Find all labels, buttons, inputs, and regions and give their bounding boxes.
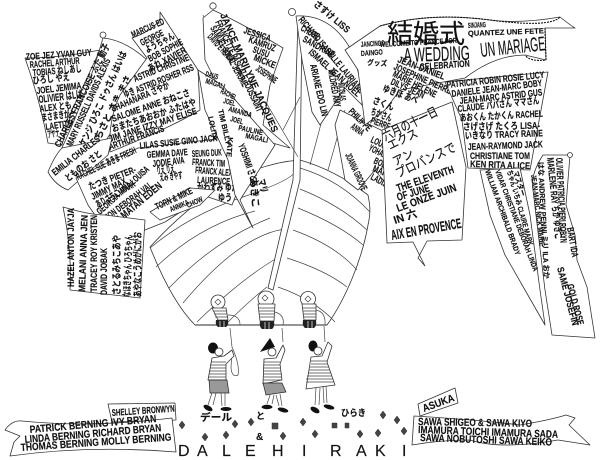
flag outline <box>48 138 112 190</box>
guest names: SAME JOSEFIN <box>554 266 580 327</box>
guest names: MELANI ANNA JEN <box>77 215 91 292</box>
guest names: ゆう <box>218 193 232 204</box>
flag outline <box>345 17 575 125</box>
guest names: KAMRUZ <box>247 34 277 54</box>
side names: ゆきほ あべ <box>381 83 420 107</box>
title letters: Dale Hiraki: L <box>222 443 231 460</box>
figure: centre man pulling rope <box>260 328 289 414</box>
of June: OF JUNE <box>395 182 431 204</box>
flag outline <box>110 12 200 152</box>
guest names: マスター <box>511 170 529 197</box>
side names: DILYS JEAN <box>389 77 426 101</box>
flag: Magali and Rachel <box>198 69 275 228</box>
title: Japanese wedding: 結婚式 <box>387 19 465 49</box>
guest names: JODIE AVA <box>152 155 185 170</box>
side names: さくん <box>371 95 396 113</box>
in: IN 六 <box>392 206 419 227</box>
guest names: PAULINE <box>238 123 264 137</box>
guest names: まさまきがー <box>41 107 76 124</box>
guest names: ASTRID CHRISTINE <box>132 52 191 85</box>
family names: SAWA SHIGEO & SAWA KIYO <box>418 416 532 430</box>
guest names: SAMUEL SOLAL JEROME <box>207 24 250 89</box>
flag outline <box>480 168 545 325</box>
ampersand: & <box>256 432 263 443</box>
flag outline <box>382 102 466 266</box>
guest names: JOEL <box>222 96 237 108</box>
guest names: GEORGE <box>138 28 166 49</box>
flag: Olivier and Marlene <box>529 152 595 338</box>
title letters: Dale Hiraki: I <box>402 443 406 460</box>
family names: PATRICK BERNING IVY BRYAN <box>29 413 157 436</box>
guest names: さげさげ たくろ LISA- <box>463 120 540 133</box>
flag: Marcus <box>107 12 200 153</box>
small flag: Asuka <box>418 388 458 416</box>
guest names: ちさと さき まさ <box>93 74 134 141</box>
flag outline <box>25 50 100 145</box>
guest names: JESSICA <box>242 25 272 45</box>
celebration: CELEBRATION <box>419 59 470 73</box>
guest names <box>529 157 586 327</box>
guest names: MILDRED AMY <box>325 69 343 108</box>
guest names: DAVID ETIENNE <box>205 32 236 65</box>
guest names: ケンジ ひろこ ドゥさん はいは <box>78 49 130 148</box>
guest names <box>342 106 396 193</box>
panel: date and place flag <box>380 102 466 266</box>
guest names: SANDRINE <box>301 34 336 61</box>
side names: JEAN-DANIEL <box>396 55 447 83</box>
side names <box>361 38 453 133</box>
title letters: Dale Hiraki: H <box>272 443 284 460</box>
boat hull <box>150 160 370 325</box>
flag ball <box>288 8 296 16</box>
guest names: なほきちゃん ひろちゃん <box>122 234 135 297</box>
flag outline <box>60 38 147 152</box>
guest names: TORN & MIKE <box>154 186 195 213</box>
flag: Patricia <box>445 70 548 172</box>
guest names: ZOE JEZ YVAN GUY <box>25 47 93 63</box>
kana: to: と <box>256 411 265 421</box>
guest names: JOSEPHINE <box>253 63 279 86</box>
title letters: Dale Hiraki: I <box>302 443 306 460</box>
guest names: SHAHANARA さやか <box>110 80 172 115</box>
guest names: ARTHUR FRANCIS <box>107 124 166 153</box>
flag outline <box>63 207 145 298</box>
french line: QUANTEZ UNE FETE <box>468 26 544 38</box>
title letters: Dale Hiraki: K <box>375 443 386 460</box>
guest names: ANNA <box>348 121 366 139</box>
guest names: ALEX とも <box>39 100 72 115</box>
guest names: MAGALI <box>245 131 269 145</box>
guest names: OLIVIER PATRICIA PIERI ROBYN <box>553 158 568 243</box>
guest names: RACHEL SUE あきま FRESH <box>75 145 138 183</box>
guest names: WILLIAM ARCHIBALD BRADY <box>483 169 522 256</box>
guest names: DAUS <box>204 69 219 81</box>
flag outline <box>76 138 240 245</box>
guest names: MART <box>371 164 393 181</box>
guest names: JIMMY MAX <box>89 176 129 203</box>
guest names: RACHEL <box>219 87 239 102</box>
guest names: DANIELE JEAN-MARC BOBY <box>451 78 543 100</box>
guest names <box>204 69 269 208</box>
guest names: JANCE MARILYNE JACQUES <box>217 12 280 134</box>
guest names: ちゃん いちみ CLAIRE MARK <box>505 169 535 247</box>
guest names: PHILIPPE <box>346 106 373 134</box>
guest names: CLAUDE パパさん ママさん <box>457 95 540 115</box>
fist: right <box>300 292 325 328</box>
guest names: TIM BILLY <box>216 108 233 146</box>
guest names: NICOLAS <box>335 82 348 101</box>
guest names: MARCUS ED <box>130 16 166 41</box>
guest names <box>296 15 366 117</box>
guest names: MARLENE RAY ちか ゆきこ <box>544 157 564 240</box>
banner: Bernings and Bryans <box>5 403 176 456</box>
family names <box>20 413 172 454</box>
flag: Jance and Jessica <box>203 3 290 148</box>
guest names: SIMON DEBORAH VAL <box>97 180 155 227</box>
guest names: YOHAN <box>367 143 389 161</box>
guest names: とものお さと <box>63 149 105 184</box>
date in French: LE ONZE JUIN <box>395 182 458 215</box>
flag outline <box>150 188 215 220</box>
guest names: BART IDA <box>564 227 580 258</box>
flag outline <box>445 72 548 170</box>
guest names: ようちゃん <box>143 31 177 56</box>
flag outline <box>198 70 275 228</box>
heading: a wedding: A WEDDING <box>403 43 470 67</box>
guest names <box>154 186 205 214</box>
guest names: JOANNA GROOVE <box>342 152 369 193</box>
masts and spars <box>203 12 345 290</box>
flag outline <box>532 155 595 338</box>
figure: right man pulling rope <box>306 326 335 415</box>
guest names <box>25 47 93 141</box>
guest names: MICKE <box>252 53 277 71</box>
side names: グッズ <box>367 57 388 68</box>
family names: SAWA NOBUTOSHI SAWA KEIKO <box>420 432 552 449</box>
Asuka name: ASUKA <box>421 392 456 415</box>
guest names: VIDAR CHRISTIANE DEBORAH LINDA <box>493 168 540 273</box>
flag: Zoe <box>25 47 100 145</box>
guest names: たつき PIETER- <box>87 165 138 193</box>
date in English: THE ELEVENTH <box>395 164 456 195</box>
place: en: アン <box>390 146 416 169</box>
Aix en Provence: AIX EN PROVENCE <box>390 215 462 243</box>
guest names: NIKITH MATAN EDEN <box>97 180 165 239</box>
fist: left <box>211 295 240 327</box>
banner outline <box>412 415 590 445</box>
flag: Richard <box>288 0 366 125</box>
guest names: FRANCETTE PASCALE TOUSSAINT <box>212 19 265 114</box>
guest names: マリ <box>255 178 269 194</box>
guest names: CHLOE <box>298 23 321 43</box>
sinjang: SINJANG <box>468 20 486 30</box>
guest names: TRACEY ROY KRISTEN <box>89 215 100 292</box>
guest names: いきなり TRACY RAINE <box>465 128 543 142</box>
family names: THOMAS BERNING MOLLY BERNING <box>20 431 172 454</box>
guest names: さとるみちこあや <box>112 235 123 295</box>
guest names: あれ XAVIER <box>146 45 189 75</box>
guest names: AMANDA <box>227 104 253 120</box>
date in Japanese: 六月の十一日 <box>380 104 440 144</box>
side names: JOSEPHINE PIERRE <box>392 62 453 97</box>
side names: DAINGO <box>361 47 383 58</box>
guest names <box>107 16 198 153</box>
guest names: ひろし やえ <box>32 72 70 87</box>
guest names <box>50 134 105 184</box>
guest names: TOBIAS ねしあし <box>32 64 82 79</box>
guest names: BOB <box>372 156 388 171</box>
kana: Hiraki: ひらき <box>341 408 366 418</box>
flag: Rachel and Simon <box>75 133 240 245</box>
guest names: アヤナ <box>47 128 60 141</box>
guest names <box>66 208 144 297</box>
place: Provence: プロバンスで <box>393 140 458 181</box>
guest names: ISMAEL JEAN NOEL <box>306 47 363 99</box>
family names: IMAMURA TOICHI IMAMURA SADA <box>418 424 559 441</box>
family names: LINDA BERNING RICHARD BRYAN <box>24 422 162 446</box>
guest names: りえ りえ <box>156 164 175 177</box>
guest names: あやなこうめがにがお <box>132 232 144 297</box>
flag: Charles Francoise <box>52 32 147 152</box>
family names <box>418 416 559 449</box>
top edge dashes <box>380 17 560 60</box>
guest names: PATRICIA ROBIN ROSIE LUCY <box>446 70 545 91</box>
side names: MARIE HELENE <box>391 69 438 100</box>
title letters: Dale Hiraki: R <box>330 443 342 460</box>
diamond kites <box>179 411 407 441</box>
guest names: GOLD ROSE <box>564 283 586 326</box>
guest names: FRANCK TIM <box>192 157 225 170</box>
small flag: Shelley <box>108 403 176 422</box>
guest names: CHOW <box>185 194 205 210</box>
banner outline <box>5 418 176 456</box>
guest names: MAGALI <box>204 76 226 91</box>
guest names: LAURENCE <box>197 175 230 188</box>
guest names: ARIANE EDO LIN <box>307 63 330 117</box>
guest names: JEAN-MARC ASTRID GUS <box>459 87 543 107</box>
flag: Joanna and Philippe <box>335 106 396 195</box>
place: Aix: エクス <box>385 126 420 153</box>
Shelley name: SHELLEY BRONWYN <box>111 404 175 419</box>
guest names: LOLITA <box>206 116 220 141</box>
title letters: Dale Hiraki: D <box>178 443 190 460</box>
flag ball <box>100 32 106 38</box>
guest names: おまたちあおおか ふたはや <box>111 97 198 135</box>
side names: JANCINGO <box>361 38 385 49</box>
guest names: あおくん たかくん RACHEL <box>460 109 543 124</box>
guest names: FRANCK ALEX <box>195 165 233 179</box>
guest names: JIM JANE IZZY MAY ELISE <box>108 106 198 145</box>
guest names: ゆき ASTRID ROSHER RSS <box>122 62 196 101</box>
guest names: JOEL JEMIMA <box>36 81 82 97</box>
guest names: ありさちこ MARK <box>94 179 138 211</box>
title letters: Dale Hiraki: A <box>197 443 208 460</box>
guest names: JOEL <box>229 114 245 126</box>
flag outline <box>335 110 395 195</box>
flag: Emilia <box>48 134 112 190</box>
guest names: RACHEL ARTHUR <box>29 56 80 71</box>
flag: Torn and Mike <box>150 186 215 220</box>
fist: centre <box>258 291 283 329</box>
guest names: KATE <box>224 137 235 158</box>
guest names: MARY RUSSELL DAVIDS ALEXIS <box>65 57 113 148</box>
guest names: あきこ <box>247 177 261 208</box>
guest names: LOUIS <box>369 135 390 152</box>
guest names: GEORGIA MINA LOUISA <box>95 164 152 217</box>
flag ball <box>210 3 216 9</box>
guest names <box>446 70 545 172</box>
kana: Dale: デール <box>200 411 232 424</box>
flag: wedding title <box>345 17 575 133</box>
guest names: OLIVIER はLは <box>38 89 83 106</box>
flag ball <box>568 152 572 158</box>
guest names: EMILIA CHARLES <box>50 134 103 178</box>
flag: Hazel <box>63 207 145 298</box>
side names: PIERRE <box>369 115 392 133</box>
guest names: SUSU <box>251 44 271 61</box>
guest names: YOSHIMI さとし <box>235 142 261 188</box>
guest names <box>75 133 238 239</box>
guest names: LILAS SUSIE GINO JACK <box>139 133 218 152</box>
guest names: LAETITIA <box>45 118 75 133</box>
flag outline <box>203 10 290 148</box>
guest names: HAZEL ANTON JAYJA <box>66 208 77 287</box>
flag outline <box>296 16 362 125</box>
guest names: JEAN-RAYMOND JACK <box>468 139 543 153</box>
title letters: Dale Hiraki: A <box>356 443 367 460</box>
guest names: JEAN-MARC NICK MARIE <box>529 174 547 247</box>
title letters: Dale Hiraki: E <box>245 443 256 460</box>
guest names: GEMMA DAVE <box>146 147 188 161</box>
banner: Sawas and Imamuras <box>412 388 590 449</box>
guest names: DAVID JOBAK <box>99 248 110 295</box>
guest names: SALOME ANNE おねこさ <box>110 88 192 125</box>
title letters: Dale Hiraki <box>178 443 406 460</box>
guest names: えみ きやす <box>159 170 183 184</box>
guest names: SEUNG DUK <box>192 147 222 160</box>
welcome line: WELCOME TO FRANCE FOR <box>380 36 457 49</box>
guest names: RICHARD ISABELLE LAURIANE <box>296 15 366 95</box>
guest names: CHRISTIANE TOM <box>470 151 530 162</box>
guest names: KEN RITA ALICE <box>470 159 530 172</box>
side names: ちかさん <box>369 106 394 124</box>
guest names: BOB SOPHIE <box>146 37 185 65</box>
guest names: CHARLES FRANCOISE ふた 動子 <box>52 41 113 149</box>
flag: William and Vidar <box>480 168 545 325</box>
guest names: かわすみ ゆか <box>197 183 238 194</box>
figure: left man pulling rope <box>202 328 238 413</box>
guest names: ANNIKA <box>168 198 191 214</box>
guest names: LADISLA <box>369 172 396 193</box>
guest names: はな ANDREW PENNI ミリ ILA おか <box>536 162 551 279</box>
top pennant: さすけ LISS <box>311 0 352 36</box>
